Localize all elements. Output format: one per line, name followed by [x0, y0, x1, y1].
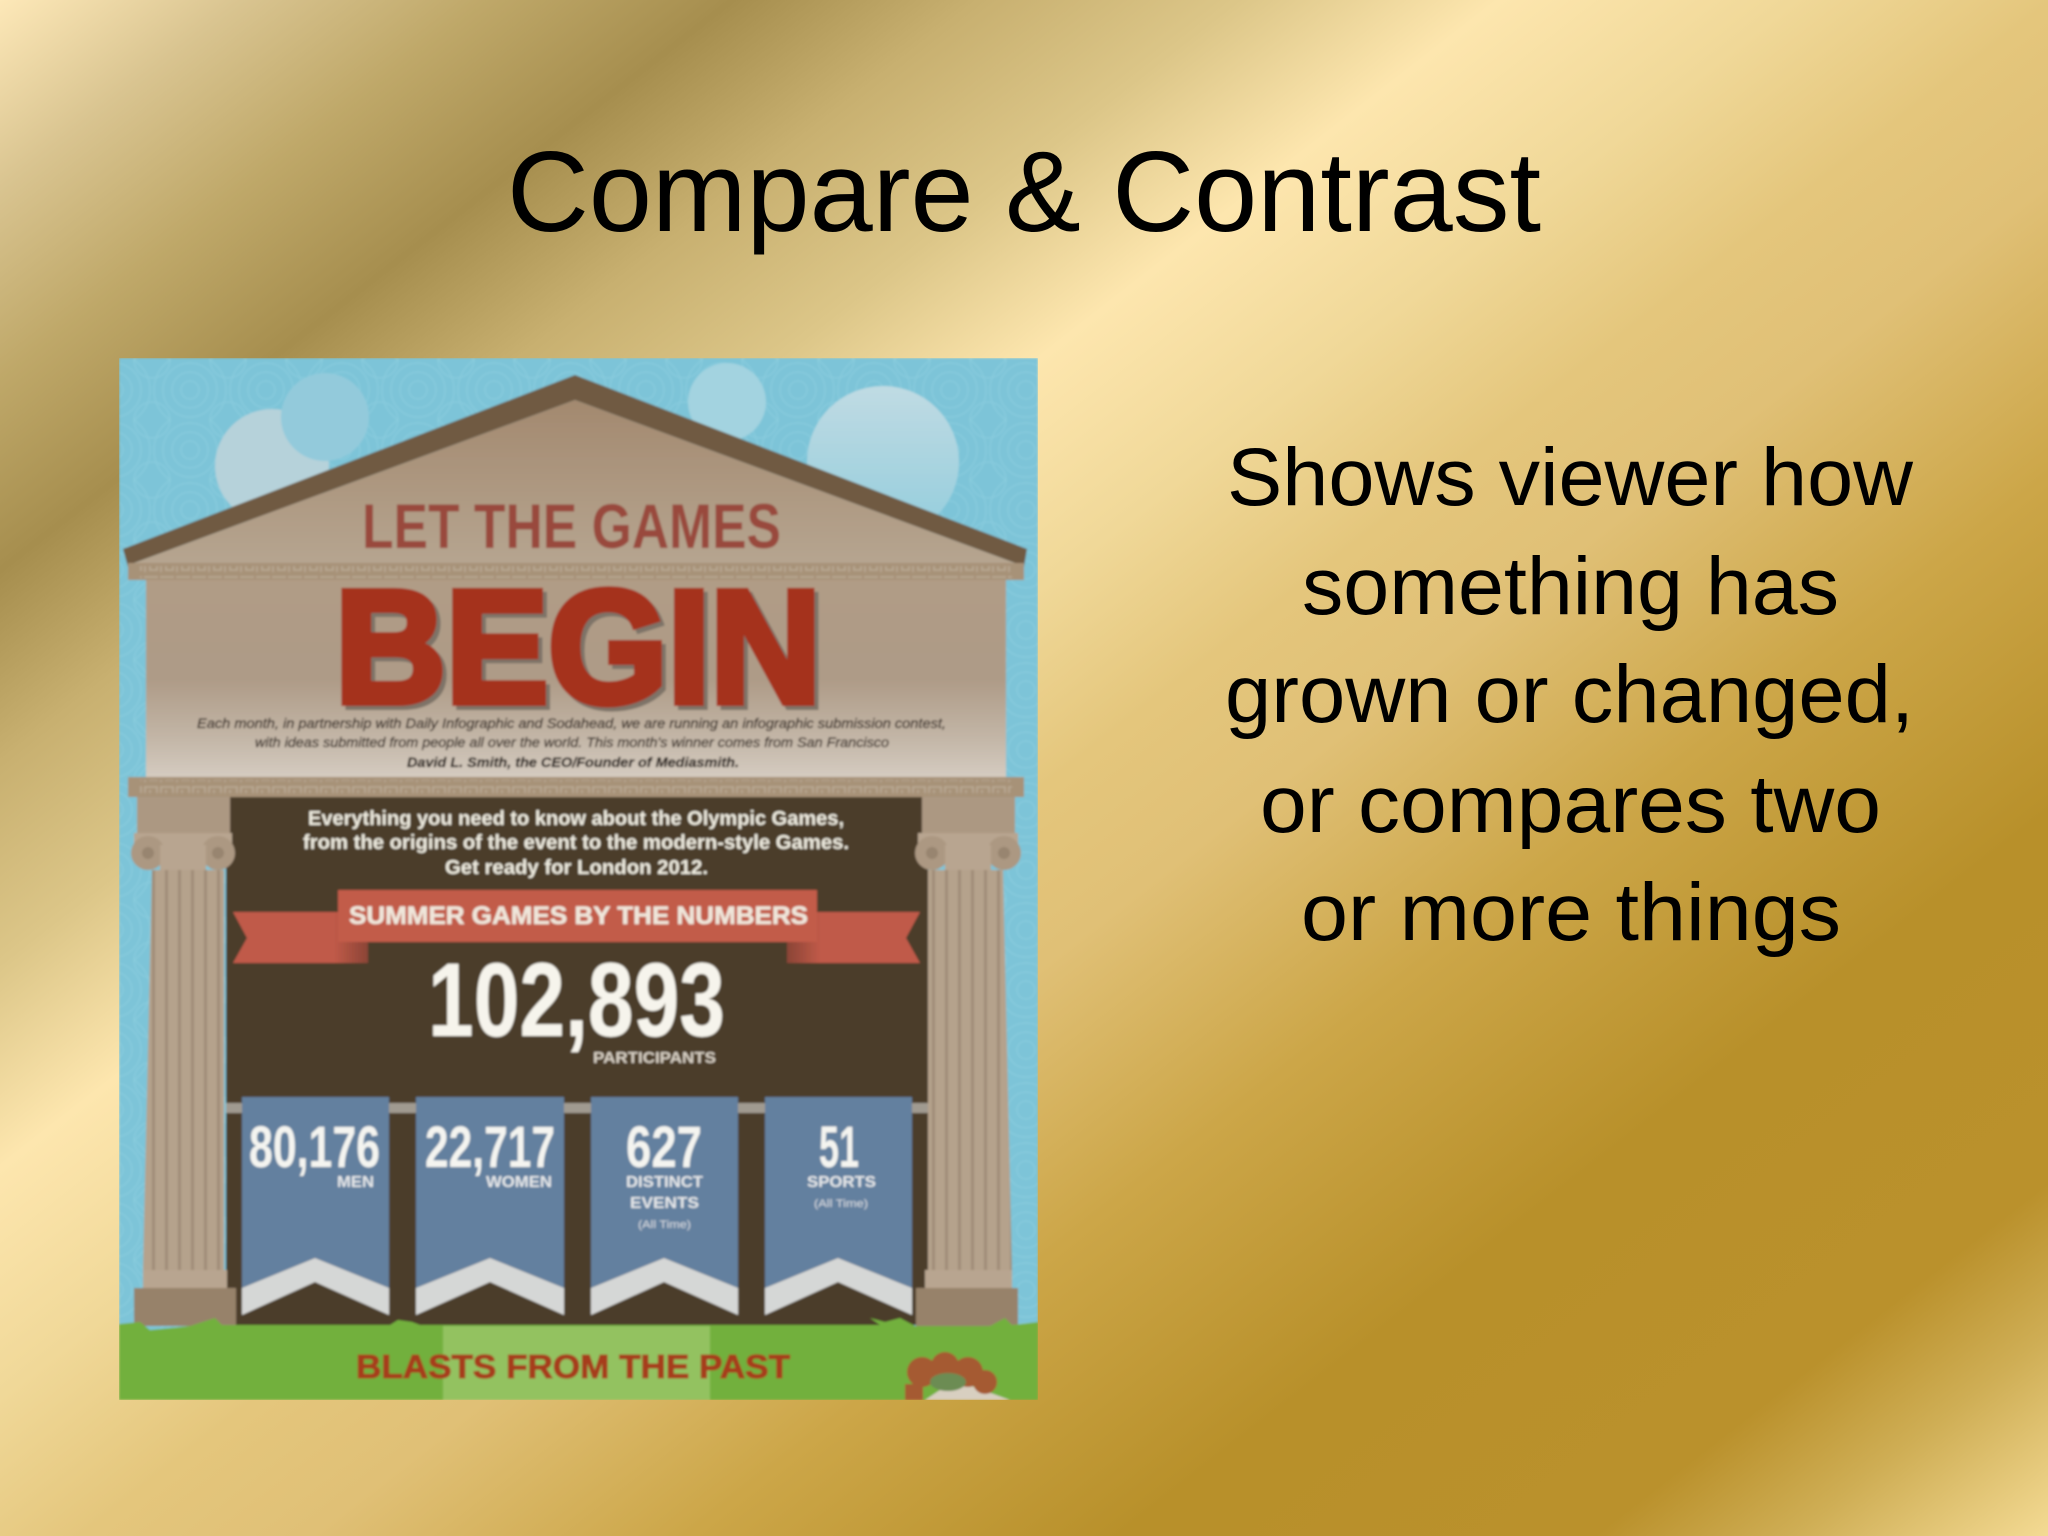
ribbon: summer games by the numbers [233, 890, 920, 963]
intro text: David L. Smith, the CEO/Founder of Mediasmith. [407, 754, 739, 770]
title: Compare & Contrast [507, 129, 1541, 256]
figure with wreath [905, 1352, 1010, 1400]
heading: begin: BEGIN [335, 557, 821, 736]
banner: men: 80,176 [249, 1115, 380, 1180]
banner rod [226, 1103, 928, 1113]
banner: distinct events: DISTINCT [626, 1174, 703, 1191]
interior description [303, 808, 849, 879]
body text: or more things [1301, 867, 1841, 958]
total participants [431, 960, 724, 1065]
infographic image panel [119, 358, 1038, 1400]
banner: women: WOMEN [486, 1174, 552, 1191]
pediment [134, 400, 1015, 563]
banner: sports: SPORTS [807, 1174, 876, 1191]
clouds [214, 362, 960, 515]
body text: something has [1302, 541, 1839, 632]
banner: men [242, 1097, 389, 1315]
body text [1225, 432, 1914, 958]
ribbon: summer games by the numbers: SUMMER GAMES BY THE NUMBERS [349, 902, 808, 930]
banner: distinct events [591, 1097, 738, 1315]
body text: grown or changed, [1225, 649, 1914, 740]
banner: distinct events: (All Time) [638, 1219, 691, 1231]
upper frieze [128, 563, 1024, 580]
body text: or compares two [1260, 759, 1881, 850]
left column [131, 797, 236, 1326]
roof [123, 375, 1027, 567]
banner: women [416, 1097, 564, 1315]
grass [119, 1318, 1038, 1400]
intro text [197, 715, 946, 770]
heading: let the games: LET THE GAMES [362, 492, 781, 562]
heading: begin [340, 585, 820, 712]
temple wall [146, 580, 1006, 778]
total participants: 102,893 [428, 942, 725, 1059]
dark interior [226, 797, 928, 1325]
heading: begin: BEGIN [339, 561, 825, 740]
total participants: PARTICIPANTS [593, 1050, 716, 1067]
sky [119, 358, 1038, 1400]
banner: sports [765, 1097, 912, 1315]
intro text: Each month, in partnership with Daily Infographic and Sodahead, we are running an infographic submission contest, [197, 715, 946, 731]
interior description: Everything you need to know about the Olympic Games, [308, 808, 844, 830]
banner: distinct events: EVENTS [630, 1195, 699, 1212]
lower frieze [128, 777, 1024, 797]
banner: distinct events: 627 [626, 1115, 702, 1180]
heading: blasts from the past: BLASTS FROM THE PAST [356, 1348, 790, 1385]
interior description: from the origins of the event to the modern-style Games. [303, 832, 849, 854]
banner: men: MEN [337, 1174, 374, 1191]
banner: sports: (All Time) [814, 1198, 868, 1210]
intro text: with ideas submitted from people all over the world. This month's winner comes from San Francisco [255, 734, 889, 750]
body text: Shows viewer how [1227, 432, 1914, 523]
right column [915, 797, 1021, 1326]
banner: sports: 51 [819, 1115, 859, 1180]
banner: women: 22,717 [425, 1115, 555, 1180]
interior description: Get ready for London 2012. [445, 857, 708, 879]
